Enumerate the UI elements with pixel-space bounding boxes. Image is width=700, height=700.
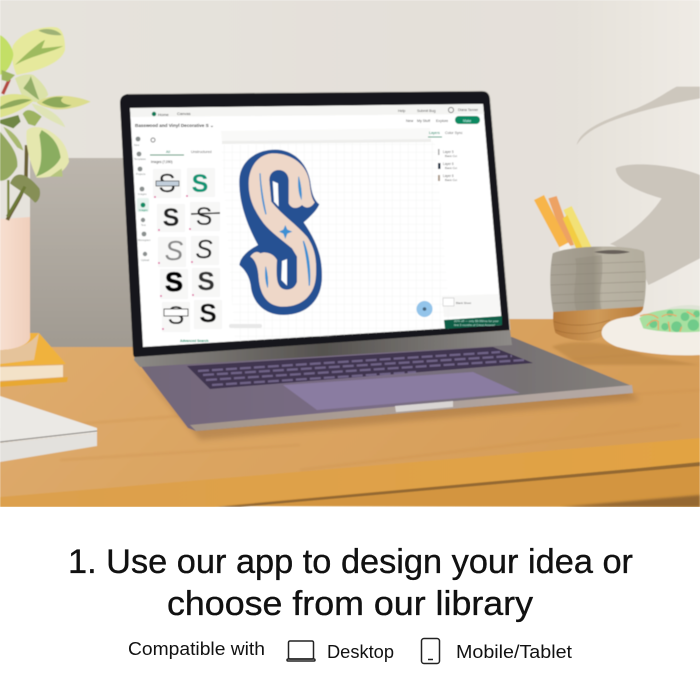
promo banner xyxy=(444,316,502,329)
keyboard xyxy=(187,347,533,389)
pen holder with pens xyxy=(534,195,646,341)
pens xyxy=(534,195,595,255)
left tool rail: Text xyxy=(141,223,146,227)
desktop label: Desktop xyxy=(327,642,394,662)
app top bar: Home xyxy=(158,112,169,117)
thumbnail letters: S xyxy=(199,298,217,328)
app screen xyxy=(130,104,502,347)
icon: laptop xyxy=(287,641,315,661)
image search panel: Images (7,090) xyxy=(151,160,172,164)
thumbnail letters xyxy=(156,168,220,330)
thumbnail letters: S xyxy=(158,168,176,198)
layers panel: Layer 6 xyxy=(443,162,454,166)
trackpad xyxy=(283,372,520,410)
zoom button xyxy=(416,301,432,317)
image search panel: Unstructured xyxy=(191,150,212,154)
promo banner: 20% off — only $9.99/mo for your xyxy=(454,319,499,323)
laptop screen bezel xyxy=(120,91,512,367)
app top bar: Color Sync xyxy=(445,131,463,135)
left tool rail: Upload xyxy=(141,258,150,262)
cup body xyxy=(550,246,646,313)
app top bar: New xyxy=(406,119,414,123)
mobile tablet label: Mobile/Tablet xyxy=(456,642,572,662)
app top bar: Diana Tanner xyxy=(458,108,479,112)
app top bar: Basswood and Vinyl Decorative S ⌄ xyxy=(135,123,214,128)
left tool rail: New xyxy=(134,143,139,147)
canvas grid xyxy=(221,141,451,342)
left tool rail: Images xyxy=(138,192,147,196)
left tool rail: Monogram xyxy=(138,238,150,242)
layers panel: Basic Cut xyxy=(445,178,457,182)
title: choose from our library xyxy=(167,585,533,623)
thumbnail letters: S xyxy=(192,170,208,198)
decorative S design xyxy=(239,150,322,315)
compatible label: Compatible with xyxy=(128,639,265,659)
layers panel: Basic Cut xyxy=(445,166,457,170)
thumbnail letters: S xyxy=(165,235,184,266)
image search panel: Advanced Search xyxy=(180,339,208,343)
image search panel: All xyxy=(166,150,170,154)
app top bar: Make xyxy=(463,119,471,123)
plant leaves xyxy=(0,27,91,220)
layers panel: Layer 6 xyxy=(443,174,454,178)
layers panel: Layer 5 xyxy=(443,150,454,154)
thumbnail letters: S xyxy=(196,203,212,231)
app top bar: Canvas xyxy=(177,111,191,116)
thumbnail letters: S xyxy=(195,234,213,264)
icon: phone xyxy=(422,638,440,664)
white caption area xyxy=(0,507,700,700)
thumbnail letters: S xyxy=(197,266,215,296)
plant pot xyxy=(0,217,30,352)
title: 1. Use our app to design your idea or xyxy=(68,543,633,581)
title xyxy=(68,543,633,623)
thumbnail letters: S xyxy=(168,302,184,330)
app top bar: Explore xyxy=(436,119,448,123)
image search panel xyxy=(150,138,260,343)
layers panel: Blank Sheet xyxy=(456,301,471,305)
plant shadows on the wall xyxy=(577,87,700,285)
notebook xyxy=(0,396,97,462)
thumb notch xyxy=(395,401,453,412)
left tool rail: Images xyxy=(139,208,148,212)
app top bar: My Stuff xyxy=(417,119,430,123)
app top bar: Help xyxy=(398,109,405,113)
thumbnail letters: S xyxy=(165,267,183,297)
promo banner: first 3 months of Cricut Access! xyxy=(454,323,495,327)
trinket dish with green beads xyxy=(552,305,700,365)
wall background xyxy=(0,0,700,350)
photo: laptop on a wooden desk xyxy=(0,0,700,507)
left tool rail: Templates xyxy=(134,157,147,161)
app top bar: Submit Bug xyxy=(417,109,436,113)
laptop xyxy=(120,91,633,431)
layers panel xyxy=(438,149,500,317)
cup copper base xyxy=(553,307,643,341)
layers panel: Basic Cut xyxy=(445,154,457,158)
app top bar xyxy=(130,104,484,144)
books xyxy=(0,333,68,387)
left tool rail xyxy=(134,137,150,262)
laptop base xyxy=(136,337,633,431)
desk xyxy=(0,319,700,507)
thumbnail letters: S xyxy=(163,204,179,232)
app top bar: Layers xyxy=(429,131,440,135)
compatibility row xyxy=(128,638,572,664)
left tool rail: Projects xyxy=(136,172,146,176)
